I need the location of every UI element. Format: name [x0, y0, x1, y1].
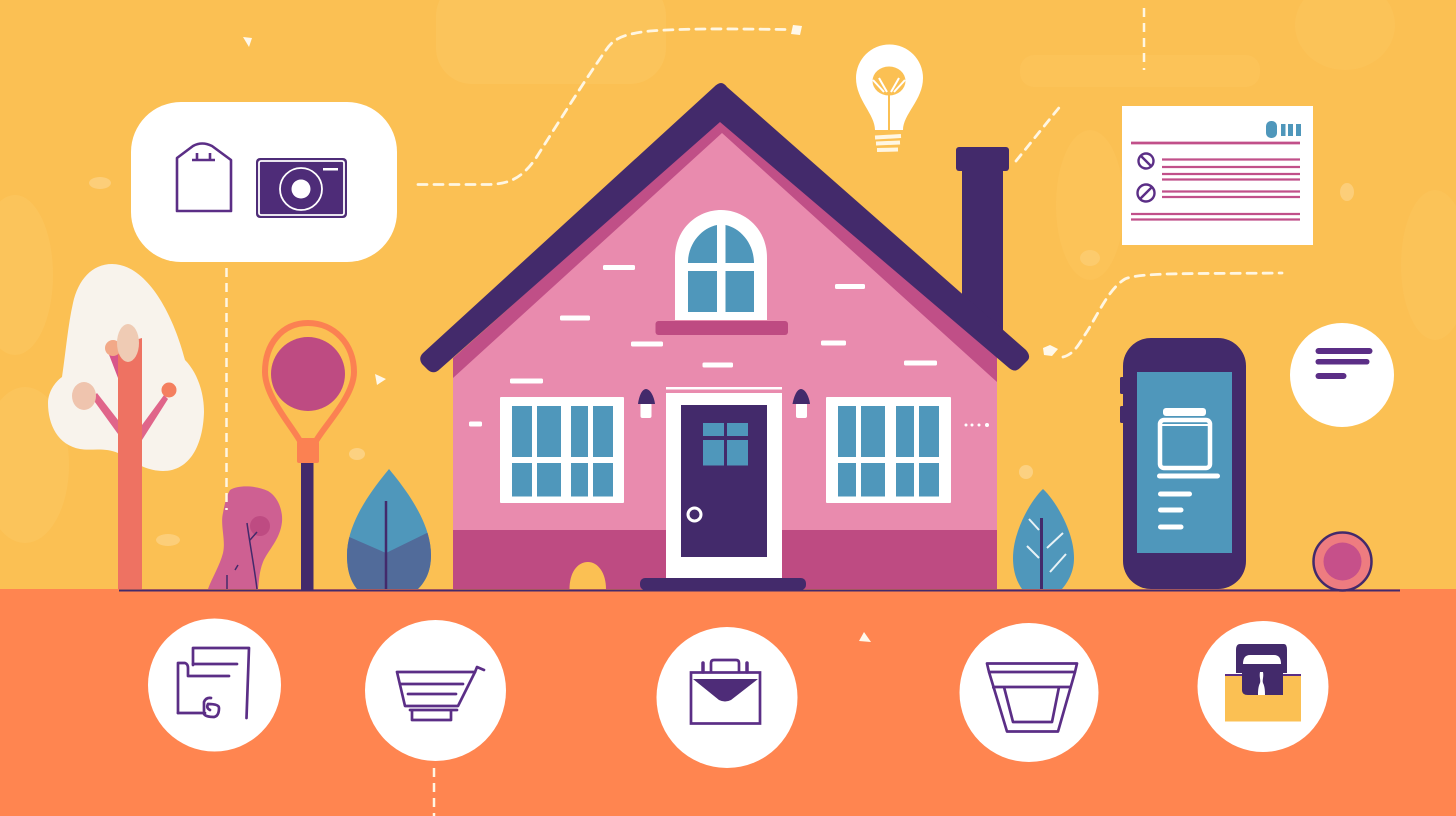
pin outline	[265, 323, 354, 441]
icon circle: shopping basket	[365, 620, 506, 761]
magenta bush	[208, 486, 282, 589]
white specks	[89, 25, 1354, 642]
small leaf plant	[1013, 489, 1074, 589]
door step	[640, 578, 806, 590]
chimney	[956, 147, 1009, 336]
right window	[826, 397, 951, 503]
phone body	[1123, 338, 1246, 589]
pin collar	[297, 441, 319, 463]
right lamp	[792, 389, 810, 418]
jar icon	[1160, 408, 1210, 468]
attic window	[675, 210, 767, 320]
house gable band	[453, 120, 997, 589]
icon: light bulb	[856, 44, 923, 150]
dashed connector: bottom	[433, 768, 435, 816]
dashed connector: top right	[1143, 8, 1145, 70]
panel: photo and tag	[131, 102, 397, 262]
message bubble	[1290, 323, 1394, 427]
house base	[453, 530, 997, 589]
icon circle: folder	[148, 618, 281, 752]
large leaf plant	[347, 469, 431, 589]
no-entry icons	[1138, 154, 1154, 202]
house	[420, 83, 1029, 590]
icon circle: padlock	[1198, 621, 1328, 752]
dashed connector: document to phone	[1063, 273, 1282, 357]
panel: document	[1122, 106, 1313, 245]
icon: camera	[256, 158, 347, 218]
map pin on a pole	[265, 323, 354, 590]
dashed connector: chimney to top right	[1016, 104, 1062, 161]
tree	[48, 264, 204, 589]
pole	[301, 463, 314, 590]
document badge	[1266, 121, 1301, 138]
yellow arch	[570, 562, 606, 589]
document sheet	[1122, 106, 1313, 245]
left window	[500, 397, 624, 503]
left lamp	[638, 389, 655, 418]
house wall	[453, 133, 997, 589]
phone	[1120, 338, 1246, 589]
ground line	[119, 590, 1400, 592]
phone screen	[1137, 372, 1232, 553]
pin disc	[271, 337, 345, 411]
tree buds	[105, 340, 121, 356]
tree trunk	[118, 338, 142, 589]
tree branches	[92, 352, 168, 440]
round coin	[1314, 532, 1372, 590]
icon circle: bucket	[960, 623, 1098, 762]
panel background	[131, 102, 397, 262]
icon: tag	[177, 144, 231, 211]
dashed connector: panel down to bush	[225, 268, 228, 510]
background texture patches	[0, 0, 1456, 543]
door	[666, 387, 782, 578]
tree canopy	[48, 264, 204, 471]
icon circle: envelope bag	[656, 627, 798, 768]
document lines	[1131, 143, 1300, 220]
phone text lines	[1157, 474, 1220, 530]
phone side buttons	[1120, 377, 1126, 423]
attic sill	[656, 321, 788, 335]
ground band	[0, 589, 1456, 816]
bricks	[469, 265, 989, 427]
roof	[420, 83, 1029, 372]
dashed connector: panel to top	[418, 29, 785, 184]
